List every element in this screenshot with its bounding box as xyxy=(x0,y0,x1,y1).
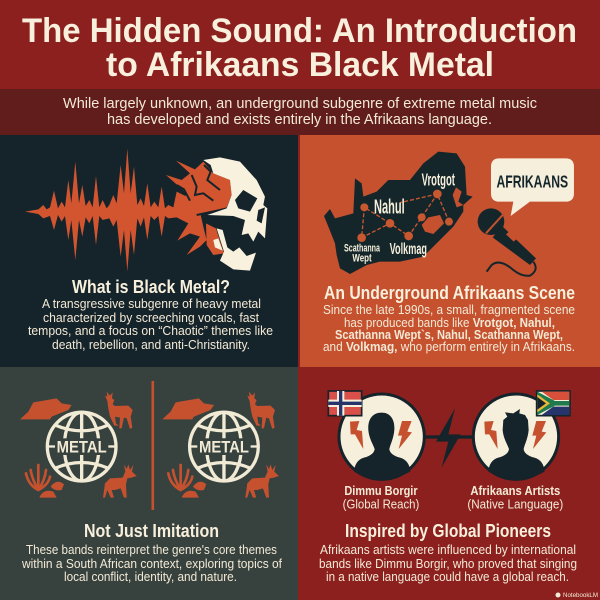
flag: South Africa xyxy=(537,391,570,416)
microphone xyxy=(478,208,536,276)
description: death, rebellion, and anti-Christianity. xyxy=(52,337,250,352)
description: tempos, and a focus on “Chaotic” themes like xyxy=(28,323,273,338)
description xyxy=(21,542,282,584)
flag: Norway xyxy=(328,391,362,416)
description: within a South African context, exploring topics of xyxy=(21,556,282,571)
band logos xyxy=(344,170,455,265)
intro band: has developed and exists entirely in the Afrikaans language. xyxy=(107,111,492,128)
description: and Volkmag, who perform entirely in Afrikaans. xyxy=(323,340,575,354)
description xyxy=(28,296,273,352)
description: has produced bands like Vrotgot, Nahul, xyxy=(344,316,555,330)
left globe and landscape xyxy=(20,392,137,498)
band logos: Vrotgot xyxy=(422,170,455,190)
network nodes xyxy=(357,190,453,242)
speech bubble: AFRIKAANS xyxy=(496,171,568,191)
right globe and landscape: METAL xyxy=(199,437,249,456)
speech bubble xyxy=(491,158,574,216)
intro band xyxy=(0,89,600,135)
network lines xyxy=(362,194,449,238)
left globe and landscape: METAL xyxy=(57,437,107,456)
waveform and skull illustration xyxy=(25,148,267,272)
antelope bottom xyxy=(245,464,279,498)
map and microphone illustration xyxy=(324,152,574,276)
skull: jaw xyxy=(206,223,224,255)
description: Afrikaans artists were influenced by international xyxy=(320,542,576,557)
sound waveform xyxy=(25,148,207,272)
antelope top xyxy=(105,392,133,429)
band logos: Nahul xyxy=(374,195,405,218)
antelope bottom xyxy=(103,464,137,498)
mountain xyxy=(20,398,72,419)
portrait: Afrikaans artist xyxy=(473,394,559,479)
skull: cream bone xyxy=(203,157,267,242)
watermark: NotebookLM xyxy=(563,592,598,599)
description: Since the late 1990s, a small, fragmented scene xyxy=(323,303,575,317)
title: to Afrikaans Black Metal xyxy=(106,46,494,84)
band logos: Volkmag xyxy=(390,241,427,258)
description: local conflict, identity, and nature. xyxy=(64,569,237,584)
description: characterized by screeching vocals, fast xyxy=(43,310,259,325)
description: A transgressive subgenre of heavy metal xyxy=(42,296,261,311)
panel: what is black metal xyxy=(0,135,298,367)
labels: (Global Reach) xyxy=(343,496,419,511)
heading: Not Just Imitation xyxy=(84,521,219,541)
map of South Africa xyxy=(324,152,473,274)
panel: inspired by global pioneers xyxy=(300,367,600,600)
panel: underground scene xyxy=(300,135,600,367)
description xyxy=(319,542,577,584)
globe xyxy=(190,412,258,481)
skull: orange fractured cranium xyxy=(166,161,232,214)
title xyxy=(22,12,577,84)
description: Scathanna Wept`s, Nahul, Scathanna Wept, xyxy=(335,328,563,342)
description: bands like Dimmu Borgir, who proved that singing xyxy=(319,556,577,571)
band logos: Scathanna xyxy=(344,243,380,255)
band logos: Wept xyxy=(352,253,372,265)
divider xyxy=(152,381,154,510)
description xyxy=(323,303,575,354)
globe xyxy=(47,412,116,481)
labels: Afrikaans Artists xyxy=(470,483,560,498)
panel: not just imitation xyxy=(0,367,298,600)
portrait: Dimmu Borgir xyxy=(339,394,424,479)
antelope top xyxy=(247,392,275,429)
bush xyxy=(168,465,206,498)
Lesotho xyxy=(422,215,444,234)
bush xyxy=(26,465,64,498)
labels: Dimmu Borgir xyxy=(344,483,418,498)
intro band: While largely unknown, an underground subgenre of extreme metal music xyxy=(63,95,537,112)
description: These bands reinterpret the genre's core themes xyxy=(26,542,277,557)
right globe and landscape xyxy=(162,392,279,498)
labels: (Native Language) xyxy=(467,496,563,511)
connector with lightning xyxy=(423,408,473,467)
title: The Hidden Sound: An Introduction xyxy=(22,12,577,50)
header xyxy=(0,0,600,135)
description: in a native language could have a global reach. xyxy=(326,569,569,584)
heading: Inspired by Global Pioneers xyxy=(345,521,551,541)
labels xyxy=(343,483,563,511)
mountain xyxy=(162,398,214,419)
comparison illustration xyxy=(328,391,570,511)
heading: What is Black Metal? xyxy=(72,277,230,297)
